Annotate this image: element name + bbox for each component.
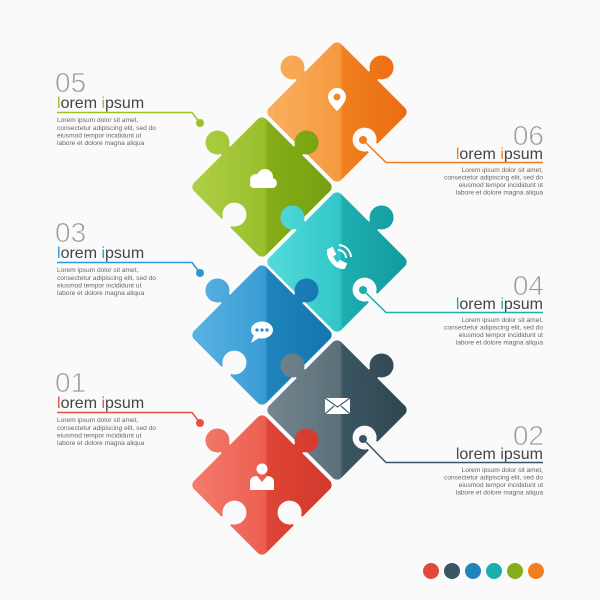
puzzle piece: slate 02 bbox=[248, 304, 427, 483]
callout 05: 05 bbox=[55, 67, 86, 98]
callout 04: lorem ipsum bbox=[456, 296, 543, 313]
callout 03: 03 bbox=[55, 217, 86, 248]
puzzle piece: red 01 bbox=[172, 379, 352, 559]
puzzle piece: orange 06 bbox=[248, 6, 427, 185]
callout 03: lorem ipsum bbox=[57, 245, 144, 262]
callout 05: labore et dolore magna aliqua bbox=[57, 140, 145, 147]
callout 01: lorem ipsum bbox=[57, 395, 144, 412]
callout 05: eiusmod tempor incididunt ut bbox=[57, 132, 141, 140]
callout 02: consectetur adipiscing elit, sed do bbox=[444, 474, 543, 482]
callout 02: eiusmod tempor incididunt ut bbox=[459, 482, 543, 489]
colour legend dots bbox=[423, 563, 544, 579]
callout 01: 01 bbox=[55, 367, 86, 398]
icon: location pin bbox=[328, 88, 346, 111]
callout 04: consectetur adipiscing elit, sed do bbox=[444, 324, 543, 332]
callout 02: Lorem ipsum dolor sit amet, bbox=[462, 467, 543, 474]
callout 03: consectetur adipiscing elit, sed do bbox=[57, 275, 156, 282]
callout 06: Lorem ipsum dolor sit amet, bbox=[462, 167, 543, 174]
callout 03: labore et dolore magna aliqua bbox=[57, 290, 145, 297]
callout 01: consectetur adipiscing elit, sed do bbox=[57, 425, 156, 432]
puzzle piece: blue 03 bbox=[172, 229, 351, 408]
callout 06: 06 bbox=[513, 120, 544, 151]
callout 03: eiusmod tempor incididunt ut bbox=[57, 282, 141, 290]
callout 06: eiusmod tempor incididunt ut bbox=[459, 182, 543, 189]
callout 06: consectetur adipiscing elit, sed do bbox=[444, 174, 543, 182]
icon: cloud bbox=[250, 169, 277, 188]
callout 03 bbox=[55, 217, 204, 297]
callout 02 bbox=[359, 420, 544, 496]
callout 01: Lorem ipsum dolor sit amet, bbox=[57, 417, 139, 424]
callout 01: eiusmod tempor incididunt ut bbox=[57, 432, 141, 440]
callout 01: labore et dolore magna aliqua bbox=[57, 440, 145, 447]
icon: envelope bbox=[325, 398, 350, 414]
callout 05: consectetur adipiscing elit, sed do bbox=[57, 125, 156, 132]
callout 05: lorem ipsum bbox=[57, 95, 144, 112]
callout 04: Lorem ipsum dolor sit amet, bbox=[462, 317, 543, 324]
icon: phone bbox=[328, 245, 351, 268]
callout 03: Lorem ipsum dolor sit amet, bbox=[57, 267, 139, 274]
callout 04: eiusmod tempor incididunt ut bbox=[459, 332, 543, 339]
callout 04: 04 bbox=[513, 270, 544, 301]
callout 06 bbox=[359, 120, 544, 196]
callout 02: lorem ipsum bbox=[456, 446, 543, 463]
callout 05 bbox=[55, 67, 204, 147]
puzzle piece: green 05 bbox=[172, 81, 351, 260]
callout 04 bbox=[359, 270, 544, 346]
callout 06: lorem ipsum bbox=[456, 146, 543, 163]
puzzle piece: teal 04 bbox=[248, 156, 427, 335]
callout 05: Lorem ipsum dolor sit amet, bbox=[57, 117, 139, 124]
callout 01 bbox=[55, 367, 204, 447]
callout 04: labore et dolore magna aliqua bbox=[456, 340, 543, 346]
callout 02: 02 bbox=[513, 420, 544, 451]
icon: person bbox=[250, 464, 274, 490]
icon: speech bubble bbox=[251, 322, 273, 343]
callout 06: labore et dolore magna aliqua bbox=[456, 190, 543, 196]
callout 02: labore et dolore magna aliqua bbox=[456, 490, 543, 496]
